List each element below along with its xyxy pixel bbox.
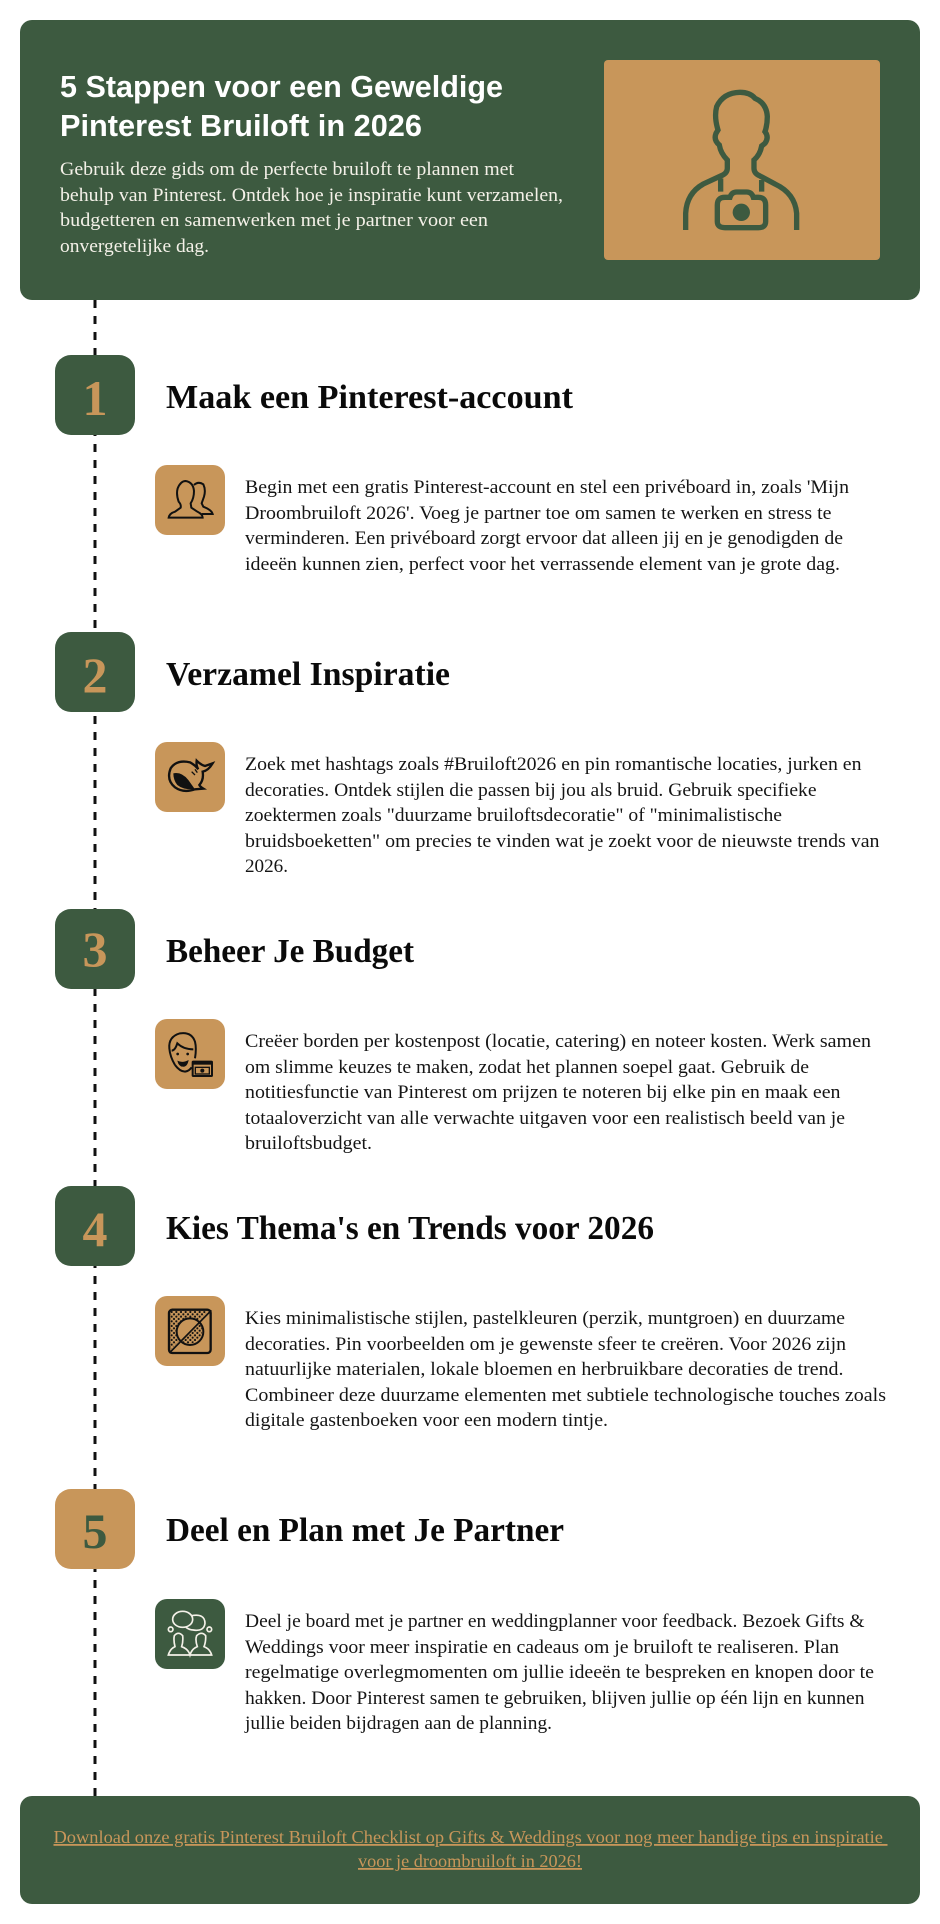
- header panel: [20, 20, 920, 300]
- step 4 text: digitale gastenboeken voor een modern tintje.: [245, 1411, 608, 1431]
- step 2 text: bruidsboeketten" om precies te vinden wat je zoekt voor de nieuwste trends van: [245, 832, 880, 852]
- step 5 text: hakken. Door Pinterest samen te gebruiken, blijven jullie op één lijn en kunnen: [245, 1689, 864, 1709]
- step 5 text: jullie beiden bijdragen aan de planning.: [244, 1714, 552, 1734]
- step 4 number badge: 4: [82, 1201, 108, 1257]
- step 2: [55, 632, 880, 877]
- step 3: [55, 909, 871, 1154]
- title: 5 Stappen voor een Geweldige: [60, 69, 503, 104]
- step 2 text: [245, 755, 880, 877]
- step 5 number badge: 5: [82, 1503, 108, 1559]
- step 3 text: [245, 1032, 871, 1154]
- header description: onvergetelijke dag.: [60, 237, 209, 257]
- step 5 text: Deel je board met je partner en weddingplanner voor feedback. Bezoek Gifts &: [245, 1612, 865, 1632]
- step 3 text: totaaloverzicht van alle verwachte uitgaven voor een realistisch beeld van je: [245, 1109, 845, 1129]
- step 2 text: zoektermen zoals "duurzame bruiloftsdecoratie" of "minimalistische: [245, 806, 782, 826]
- step 3 text: om slimme keuzes te maken, zodat het plannen soepel gaat. Gebruik de: [245, 1058, 809, 1078]
- step 1 heading: Maak een Pinterest-account: [166, 379, 574, 416]
- step 5 heading: Deel en Plan met Je Partner: [166, 1512, 564, 1549]
- step 2 number badge: 2: [82, 647, 108, 703]
- step 1 number badge: 1: [82, 370, 108, 426]
- step 4 text: [245, 1309, 886, 1431]
- step 2 text: 2026.: [245, 857, 288, 877]
- step 4 text: decoraties. Pin voorbeelden om je gewenste sfeer te creëren. Voor 2026 zijn: [245, 1335, 846, 1355]
- timeline dashed line: [94, 300, 96, 1796]
- title: [60, 69, 503, 143]
- step 4 text: Kies minimalistische stijlen, pastelkleuren (perzik, muntgroen) en duurzame: [245, 1309, 845, 1329]
- step 3 text: notitiesfunctie van Pinterest om prijzen te noteren bij elke pin en maak een: [245, 1083, 840, 1103]
- icon: two people: [155, 465, 225, 535]
- step 1 text: [245, 478, 849, 575]
- step 1 text: ideeën kunnen zien, perfect voor het verrassende element van je grote dag.: [245, 555, 840, 575]
- footer call to action: Download onze gratis Pinterest Bruiloft Checklist op Gifts & Weddings voor nog meer handige tips en inspiratie: [54, 1827, 887, 1847]
- step 1 number badge: [55, 355, 135, 435]
- step 4: [55, 1186, 886, 1431]
- step 2 heading: Verzamel Inspiratie: [166, 656, 450, 693]
- step 1 text: verminderen. Een privéboard zorgt ervoor dat alleen jij en je genodigden de: [245, 529, 843, 549]
- step 5 text: [244, 1612, 874, 1734]
- title: Pinterest Bruiloft in 2026: [60, 108, 422, 143]
- step 5 text: regelmatige overlegmomenten om jullie ideeën te bespreken en knopen door te: [245, 1663, 874, 1683]
- footer call to action: voor je droombruiloft in 2026!: [358, 1851, 582, 1871]
- step 3 text: Creëer borden per kostenpost (locatie, catering) en noteer kosten. Werk samen: [245, 1032, 871, 1052]
- step 3 number badge: [55, 909, 135, 989]
- step 3 text: bruiloftsbudget.: [245, 1134, 372, 1154]
- step 4 text: natuurlijke materialen, lokale bloemen en herbruikbare decoraties de trend.: [245, 1360, 844, 1380]
- footer panel: [20, 1796, 920, 1904]
- header description: [60, 160, 563, 257]
- step 4 number badge: [55, 1186, 135, 1266]
- icon: crossed-out circle in square: [155, 1296, 225, 1366]
- step 4 heading: Kies Thema's en Trends voor 2026: [166, 1210, 654, 1247]
- step 3 heading: Beheer Je Budget: [166, 933, 415, 970]
- step 2 text: Zoek met hashtags zoals #Bruiloft2026 en pin romantische locaties, jurken en: [245, 755, 862, 775]
- step 2 text: decoraties. Ontdek stijlen die passen bij jou als bruid. Gebruik specifieke: [245, 781, 816, 801]
- step 1: [55, 355, 849, 575]
- icon: person with money card: [155, 1019, 225, 1089]
- step 1 text: Begin met een gratis Pinterest-account en stel een privéboard in, zoals 'Mijn: [245, 478, 849, 498]
- hero image: photographer icon: [604, 60, 880, 260]
- step 5 number badge: [55, 1489, 135, 1569]
- step 5: [55, 1489, 874, 1734]
- step 3 number badge: 3: [82, 921, 108, 977]
- header description: budgetteren en samenwerken met je partner voor een: [60, 211, 488, 231]
- icon: whale: [155, 742, 225, 812]
- step 2 number badge: [55, 632, 135, 712]
- step 5 text: Weddings voor meer inspiratie en cadeaus om je bruiloft te realiseren. Plan: [245, 1638, 839, 1658]
- footer call to action: [54, 1827, 887, 1871]
- header description: Gebruik deze gids om de perfecte bruiloft te plannen met: [60, 160, 515, 180]
- icon: two people talking: [155, 1599, 225, 1669]
- header description: behulp van Pinterest. Ontdek hoe je inspiratie kunt verzamelen,: [60, 186, 563, 206]
- step 1 text: Droombruiloft 2026'. Voeg je partner toe om samen te werken en stress te: [245, 504, 832, 524]
- step 4 text: Combineer deze duurzame elementen met subtiele technologische touches zoals: [245, 1386, 886, 1406]
